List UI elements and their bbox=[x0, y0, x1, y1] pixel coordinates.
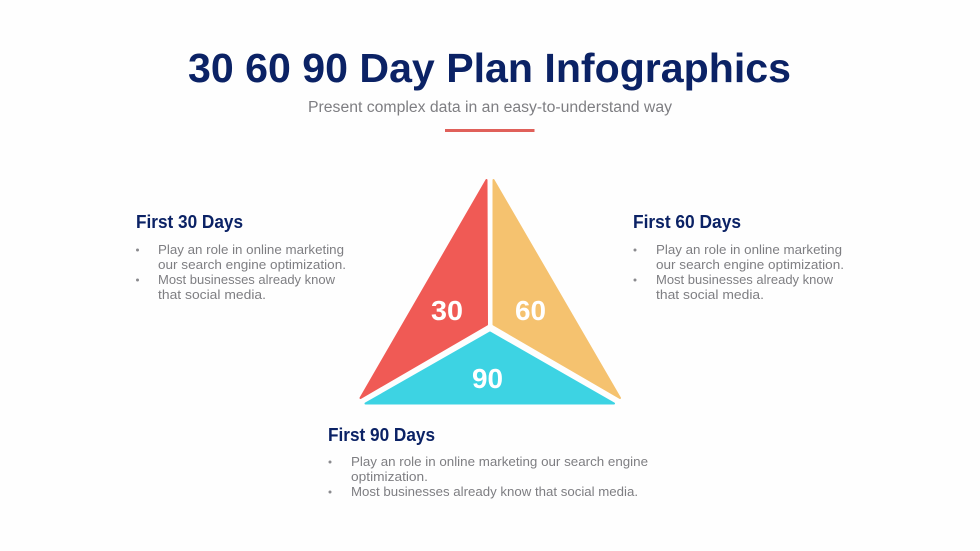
panel: first 60 days bbox=[633, 212, 844, 302]
segment: 90 cyan bbox=[366, 332, 614, 404]
number 90: 90 bbox=[472, 363, 503, 394]
number 30: 30 bbox=[431, 295, 463, 326]
heading: First 90 Days bbox=[328, 425, 435, 445]
bullet list: optimization. bbox=[351, 469, 428, 484]
heading: First 60 Days bbox=[633, 212, 741, 232]
panel: first 30 days bbox=[136, 212, 346, 302]
title: 30 60 90 Day Plan Infographics bbox=[188, 45, 791, 91]
heading: First 30 Days bbox=[136, 212, 243, 232]
bullet list: Play an role in online marketing our search engine bbox=[351, 454, 648, 469]
bullet list bbox=[136, 242, 346, 302]
subtitle: Present complex data in an easy-to-understand way bbox=[308, 99, 672, 116]
bullet list bbox=[328, 454, 648, 499]
bullet list: Play an role in online marketing bbox=[158, 242, 344, 257]
bullet list: our search engine optimization. bbox=[656, 257, 844, 272]
segment: 60 orange bbox=[494, 180, 620, 398]
bullet list bbox=[634, 242, 844, 302]
bullet list: Most businesses already know bbox=[158, 272, 336, 287]
bullet list: that social media. bbox=[656, 287, 764, 302]
bullet list: Most businesses already know bbox=[656, 272, 834, 287]
triangle diagram bbox=[360, 180, 620, 404]
number 60: 60 bbox=[515, 295, 546, 326]
title underline bbox=[445, 129, 534, 132]
segment: 30 red bbox=[360, 180, 487, 398]
panel: first 90 days bbox=[328, 425, 648, 499]
bullet list: that social media. bbox=[158, 287, 266, 302]
bullet list: Most businesses already know that social media. bbox=[351, 484, 638, 499]
bullet list: Play an role in online marketing bbox=[656, 242, 842, 257]
bullet list: our search engine optimization. bbox=[158, 257, 346, 272]
